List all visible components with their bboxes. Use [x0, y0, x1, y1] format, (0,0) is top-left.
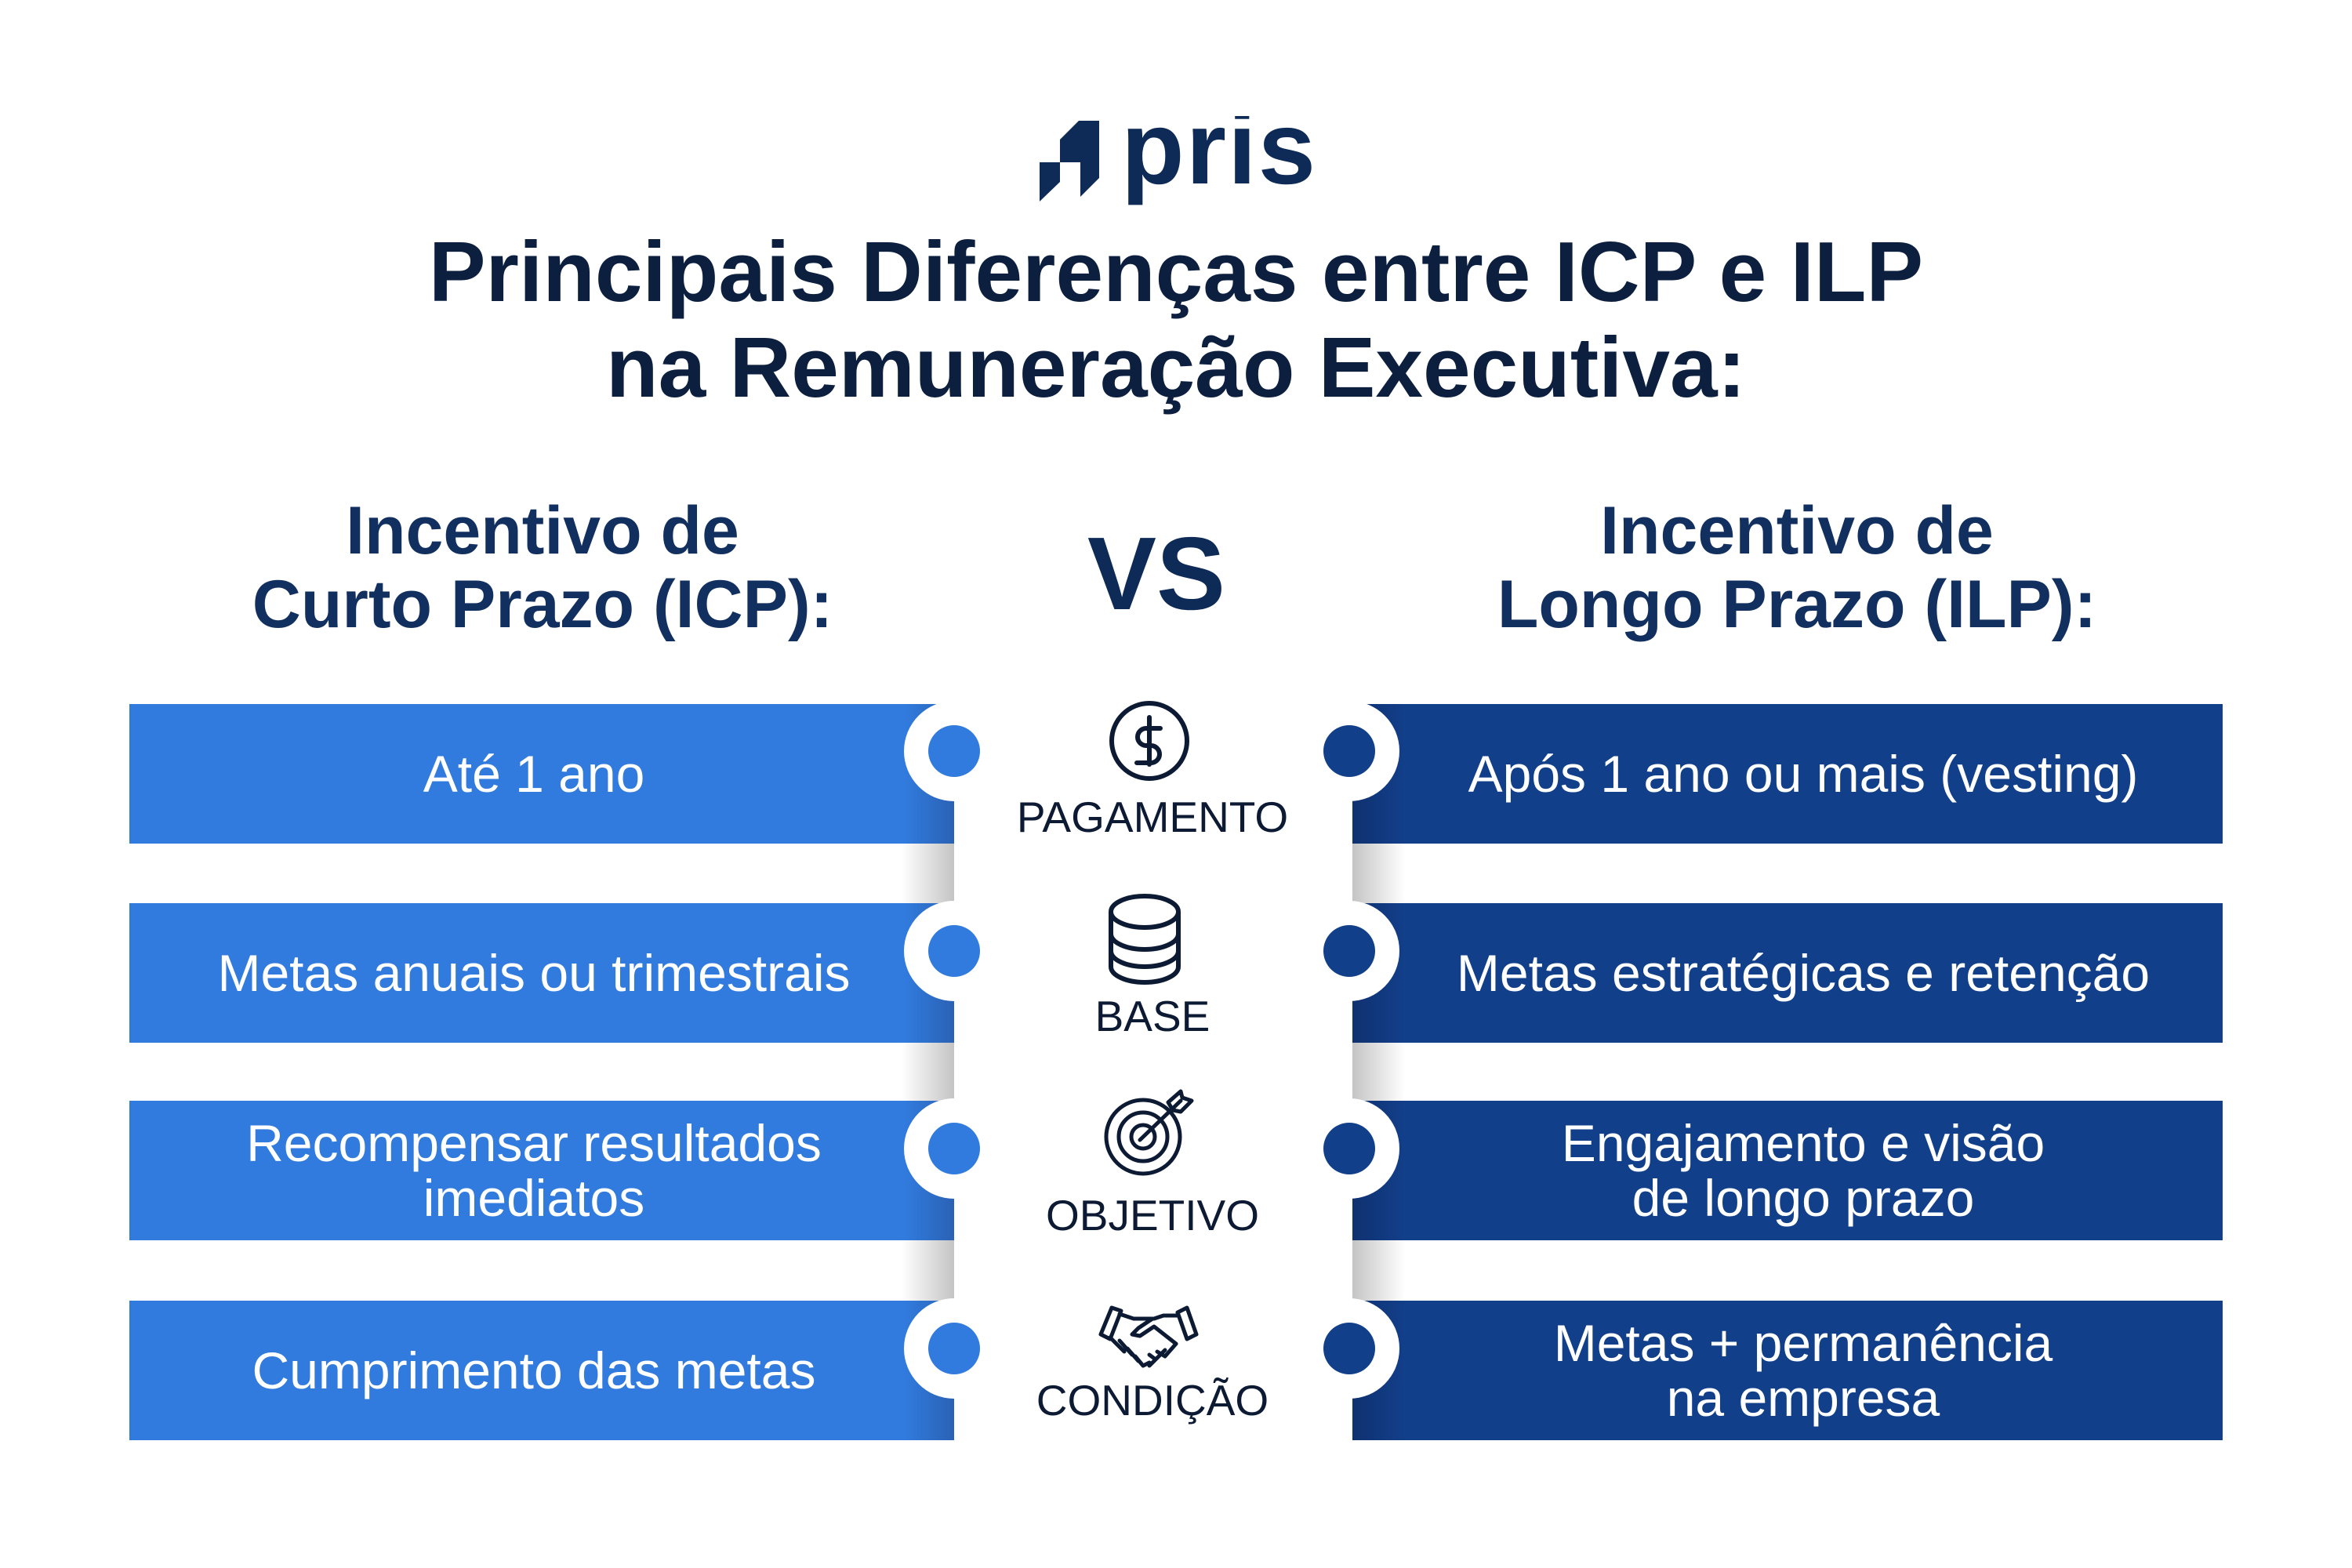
- center white panel: [954, 699, 1352, 1444]
- heading: ICP: Curto Prazo (ICP):: [252, 567, 833, 642]
- left bar 3: [129, 1101, 954, 1240]
- left bar 3: Recompensar resultados: [246, 1114, 822, 1172]
- icon: dollar: [1109, 701, 1189, 781]
- right bar 3: [1352, 1101, 2223, 1240]
- heading: VS: VS: [1087, 516, 1225, 631]
- right bar 3: de longo prazo: [1632, 1169, 1974, 1227]
- left bar 1: Até 1 ano: [423, 745, 644, 803]
- right bulges: [1299, 701, 1399, 801]
- left bar 4: Cumprimento das metas: [252, 1341, 815, 1399]
- title: na Remuneração Executiva:: [606, 320, 1746, 416]
- right dots: [1323, 725, 1375, 777]
- left bar 1: [129, 704, 954, 844]
- right bar 3: Engajamento e visão: [1562, 1114, 2045, 1172]
- heading: ILP: Incentivo de: [1600, 493, 1994, 568]
- right bar 4: Metas + permanência: [1554, 1314, 2053, 1372]
- label: PAGAMENTO: PAGAMENTO: [1017, 793, 1288, 841]
- right bar 1: [1352, 704, 2223, 844]
- right bar 2: [1352, 903, 2223, 1043]
- heading: ILP: [1497, 493, 2096, 642]
- heading: ICP: [252, 493, 833, 642]
- right bar 4: [1352, 1301, 2223, 1440]
- title: Principais Diferenças entre ICP e ILP: [429, 224, 1923, 320]
- right bar 2: Metas estratégicas e retenção: [1457, 944, 2150, 1002]
- heading: ILP: Longo Prazo (ILP):: [1497, 567, 2096, 642]
- left bar 2: [129, 903, 954, 1043]
- right bar 1: Após 1 ano ou mais (vesting): [1468, 745, 2138, 803]
- shadows between rows: [902, 844, 954, 903]
- icon: target: [1104, 1090, 1193, 1176]
- heading: ICP: Incentivo de: [346, 493, 739, 568]
- label: CONDIÇÃO: CONDIÇÃO: [1036, 1376, 1269, 1425]
- icon: database: [1109, 894, 1181, 985]
- left bar 2: Metas anuais ou trimestrais: [218, 944, 850, 1002]
- label: OBJETIVO: OBJETIVO: [1046, 1191, 1259, 1240]
- title: [429, 224, 1923, 416]
- left bar 3: imediatos: [423, 1169, 644, 1227]
- label: BASE: BASE: [1095, 992, 1210, 1040]
- right bar 4: na empresa: [1667, 1369, 1940, 1427]
- left bulges: [904, 701, 1004, 801]
- left dots: [928, 725, 980, 777]
- left bar 4: [129, 1301, 954, 1440]
- icon: handshake: [1098, 1306, 1199, 1367]
